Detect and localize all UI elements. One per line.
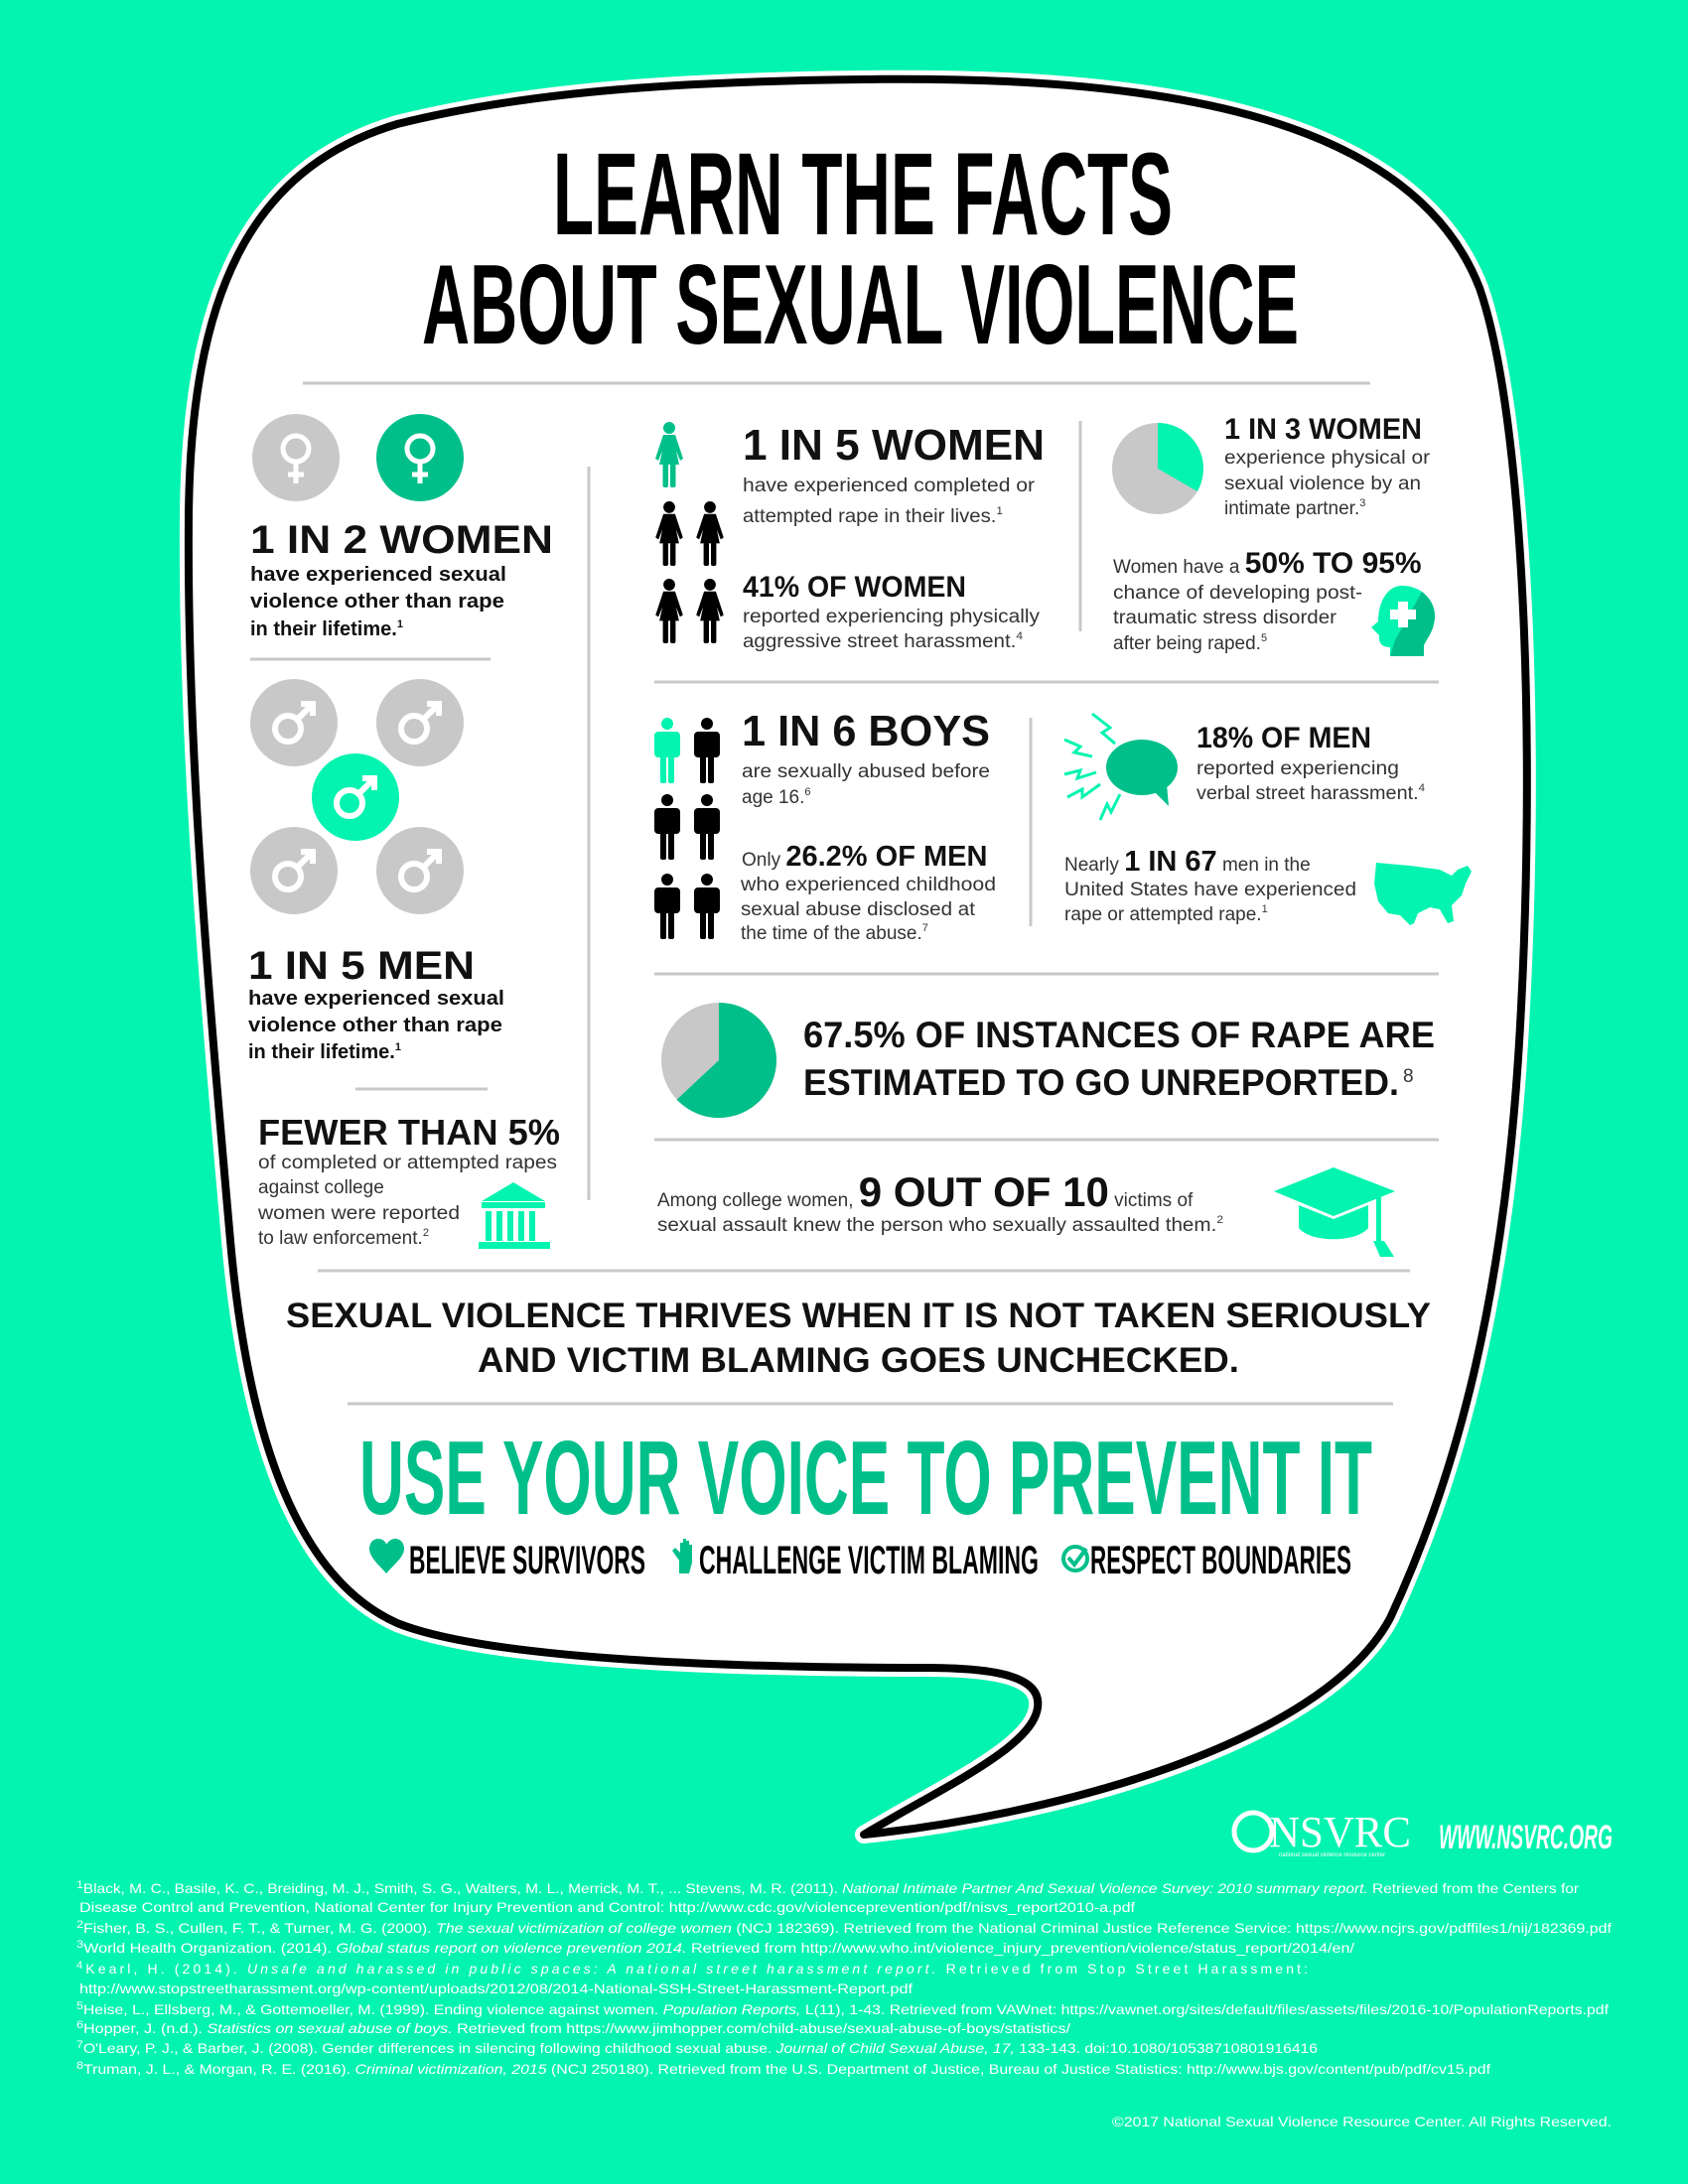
panel: 1 in 67 men: 1 [1262, 903, 1268, 915]
footnotes: http://www.stopstreetharassment.org/wp-content/uploads/2012/08/2014-National-SSH-Street-Harassment-Report.pdf [79, 1980, 913, 1996]
footnotes: Kearl, H. (2014). [85, 1961, 244, 1977]
panel: 1 in 3 women: 5 [1261, 632, 1267, 644]
action list: CHALLENGE VICTIM BLAMING [699, 1539, 1039, 1582]
footnotes: Black, M. C., Basile, K. C., Breiding, M. J., Smith, S. G., Walters, M. L., Merrick, M. T., ... Stevens, M. R. (2011). [83, 1880, 842, 1896]
footnotes: 8 [76, 2060, 83, 2072]
panel: 1 in 3 women: traumatic stress disorder [1113, 608, 1337, 628]
speech bubble [189, 79, 1527, 1835]
panel: fewer than 5%: of completed or attempted rapes [258, 1153, 557, 1173]
panel: 1 in 2 women: 1 IN 2 WOMEN [250, 518, 553, 562]
panel: 67.5% unreported: 67.5% OF INSTANCES OF RAPE ARE [803, 1015, 1435, 1055]
panel: 1 in 6 boys: age 16. [742, 787, 804, 808]
panel: 1 in 5 men [248, 679, 504, 1063]
panel: 1 in 6 boys: are sexually abused before [742, 761, 990, 782]
footnotes: 3 [76, 1939, 83, 1951]
icon: male symbols [250, 679, 464, 914]
panel: 1 in 3 women: intimate partner. [1224, 498, 1359, 519]
panel: 1 in 2 women [250, 414, 553, 640]
logo: NSVRC: national sexual violence resource center [1279, 1852, 1385, 1858]
panel: 18% of men: verbal street harassment. [1196, 783, 1409, 804]
footnotes: Population Reports, L(11), 1-43. Retrieved from VAWnet: https://vawnet.org/sites/default/files/assets/files/2016-10/PopulationReports.pdf [663, 2001, 1517, 2017]
footnotes: Heise, L., Ellsberg, M., & Gottemoeller, M. (1999). Ending violence against women. [83, 2001, 663, 2017]
panel: fewer than 5%: FEWER THAN 5% [258, 1112, 560, 1153]
panel: 1 in 5 women: 4 [1016, 630, 1023, 642]
panel: fewer than 5%: women were reported [257, 1203, 460, 1224]
panel: 1 in 6 boys: 7 [922, 922, 928, 934]
footnotes: Journal of Child Sexual Abuse, 17, 133-143. doi:10.1080/10538710801916416 [776, 2040, 1285, 2056]
panel: 18% of men [1064, 714, 1425, 820]
panel: 1 in 5 women [655, 421, 1045, 652]
panel: 1 in 6 boys: 6 [804, 786, 811, 798]
icon: hand [672, 1539, 692, 1573]
footnotes [76, 1879, 1612, 2077]
panel: 1 in 6 boys [654, 707, 996, 944]
panel: 1 in 3 women: sexual violence by an [1224, 474, 1421, 494]
panel: 1 in 3 women: 3 [1359, 497, 1365, 509]
copyright: ©2017 National Sexual Violence Resource Center. All Rights Reserved. [1112, 2114, 1612, 2129]
icon: shouting speech bubble [1064, 714, 1178, 820]
panel: 1 in 6 boys: Only 26.2% OF MEN [742, 841, 987, 873]
panel: 1 in 5 women: reported experiencing physically [743, 607, 1041, 627]
footnotes: Hopper, J. (n.d.). [83, 2020, 208, 2036]
panel: 67.5% unreported [661, 1003, 1435, 1118]
panel: fewer than 5%: against college [258, 1177, 384, 1198]
panel: 67.5% unreported: 8 [1403, 1066, 1414, 1087]
panel: 1 in 3 women: chance of developing post- [1113, 583, 1362, 604]
title [422, 129, 1299, 368]
pie chart: 67.5% [661, 1003, 776, 1118]
panel: fewer than 5%: 2 [423, 1227, 429, 1239]
panel: 1 in 67 men: rape or attempted rape. [1064, 904, 1262, 925]
panel: 1 in 5 men: have experienced sexual [248, 988, 504, 1010]
panel: 1 in 6 boys: the time of the abuse. [741, 923, 922, 944]
panel: 9 out of 10: 2 [1216, 1214, 1223, 1226]
footnotes: 1 [76, 1879, 83, 1891]
panel: 1 in 5 women: aggressive street harassment. [743, 631, 996, 652]
panel: 1 in 6 boys: sexual abuse disclosed at [741, 899, 976, 920]
icon: heart [369, 1539, 404, 1573]
panel: 1 in 2 women: in their lifetime. [250, 618, 397, 640]
icon: women figures [655, 422, 724, 643]
panel: 1 in 5 women: 1 IN 5 WOMEN [743, 421, 1045, 470]
panel: 9 out of 10: Among college women, 9 OUT OF 10 victims of [657, 1168, 1194, 1215]
action list: BELIEVE SURVIVORS [409, 1539, 645, 1582]
panel: 1 in 5 men: in their lifetime. [248, 1041, 395, 1063]
footnotes: Unsafe and harassed in public spaces: A national street harassment report. Retrieved from Stop Street Harassment: [247, 1961, 1308, 1977]
callout: sexual violence thrives [286, 1297, 1431, 1380]
footnotes: The sexual victimization of college women (NCJ 182369). Retrieved from the National Criminal Justice Reference Service: https://www.ncjrs.gov/pdffiles1/nij/182369.pdf [436, 1920, 1504, 1936]
footnotes: Statistics on sexual abuse of boys. Retrieved from https://www.jimhopper.com/child-abuse/sexual-abuse-of-boys/statistics/ [208, 2020, 989, 2036]
icon: check circle [1063, 1547, 1087, 1570]
footnotes: National Intimate Partner And Sexual Violence Survey: 2010 summary report. Retrieved from the Centers for [842, 1880, 1559, 1896]
action list: RESPECT BOUNDARIES [1090, 1539, 1351, 1582]
callout: sexual violence thrives: AND VICTIM BLAMING GOES UNCHECKED. [478, 1341, 1239, 1380]
footnotes: Global status report on violence prevention 2014. Retrieved from http://www.who.int/violence_injury_prevention/violence/status_report/2014/en/ [337, 1940, 1264, 1956]
footnotes: 2 [76, 1919, 83, 1931]
panel: 9 out of 10 [657, 1167, 1395, 1257]
icon: graduation cap [1274, 1167, 1395, 1257]
panel: 18% of men: 4 [1419, 782, 1425, 794]
footnotes: Disease Control and Prevention, National Center for Injury Prevention and Control: http://www.cdc.gov/violenceprevention/pdf/nisvs_report2010-a.pdf [79, 1899, 1135, 1915]
footnotes: 7 [76, 2039, 83, 2051]
panel: 1 in 5 men: violence other than rape [248, 1015, 502, 1036]
panel: 1 in 5 women: 41% OF WOMEN [743, 571, 966, 604]
panel: 1 in 3 women: after being raped. [1113, 633, 1261, 654]
panel: 1 in 5 women: have experienced completed or [743, 476, 1036, 496]
footnotes: 4 [76, 1960, 82, 1972]
panel: 9 out of 10: sexual assault knew the person who sexually assaulted them. [657, 1215, 1173, 1236]
footnotes: Fisher, B. S., Cullen, F. T., & Turner, M. G. (2000). [83, 1920, 436, 1936]
panel: 1 in 6 boys: who experienced childhood [740, 875, 996, 895]
footnotes: Criminal victimization, 2015 (NCJ 250180). Retrieved from the U.S. Department of Justice, Bureau of Justice Statistics: http://www.bjs.gov/content/pub/pdf/cv15.pdf [355, 2061, 1379, 2077]
icon: female symbols [252, 414, 464, 501]
footnotes: World Health Organization. (2014). [83, 1940, 337, 1956]
panel: 1 in 67 men: United States have experienced [1064, 880, 1356, 900]
logo: NSVRC: NSVRC [1269, 1808, 1411, 1856]
panel: 1 in 3 women: Women have a 50% TO 95% [1113, 547, 1422, 580]
panel: 1 in 5 women: attempted rape in their lives. [743, 506, 980, 527]
footnotes: 5 [76, 2000, 83, 2012]
footnotes: Truman, J. L., & Morgan, R. E. (2016). [83, 2061, 355, 2077]
callout: sexual violence thrives: SEXUAL VIOLENCE THRIVES WHEN IT IS NOT TAKEN SERIOUSLY [286, 1297, 1431, 1335]
panel: 1 in 2 women: violence other than rape [250, 591, 504, 613]
panel: 1 in 67 men: Nearly 1 IN 67 men in the [1064, 846, 1311, 878]
footnotes: 6 [76, 2019, 83, 2031]
panel: 1 in 5 women: 1 [996, 505, 1003, 517]
panel: fewer than 5% [257, 1112, 560, 1249]
footnotes: O'Leary, P. J., & Barber, J. (2008). Gender differences in silencing following childhood sexual abuse. [83, 2040, 776, 2056]
panel: 1 in 3 women: experience physical or [1224, 448, 1431, 469]
panel: 67.5% unreported: ESTIMATED TO GO UNREPORTED. [803, 1062, 1399, 1103]
panel: 1 in 3 women: 1 IN 3 WOMEN [1224, 413, 1422, 446]
panel: 1 in 2 women: 1 [397, 618, 403, 630]
icon: head with cross [1371, 586, 1435, 656]
icon: courthouse [479, 1182, 550, 1249]
panel: 1 in 67 men [1064, 846, 1472, 925]
action list [369, 1539, 1351, 1582]
panel: 1 in 5 men: 1 [395, 1041, 401, 1053]
panel: 18% of men: 18% OF MEN [1196, 722, 1371, 754]
icon: US map [1374, 863, 1472, 925]
panel: 1 in 3 women [1112, 413, 1435, 656]
panel: 1 in 2 women: have experienced sexual [250, 564, 506, 586]
icon: boy figures [654, 718, 720, 939]
title: LEARN THE FACTS [553, 129, 1173, 260]
panel: fewer than 5%: to law enforcement. [258, 1228, 423, 1249]
panel: 1 in 5 men: 1 IN 5 MEN [248, 944, 475, 988]
pie chart: 1 in 3 [1112, 423, 1203, 514]
panel: 18% of men: reported experiencing [1196, 758, 1399, 779]
panel: 1 in 6 boys: 1 IN 6 BOYS [742, 707, 990, 755]
